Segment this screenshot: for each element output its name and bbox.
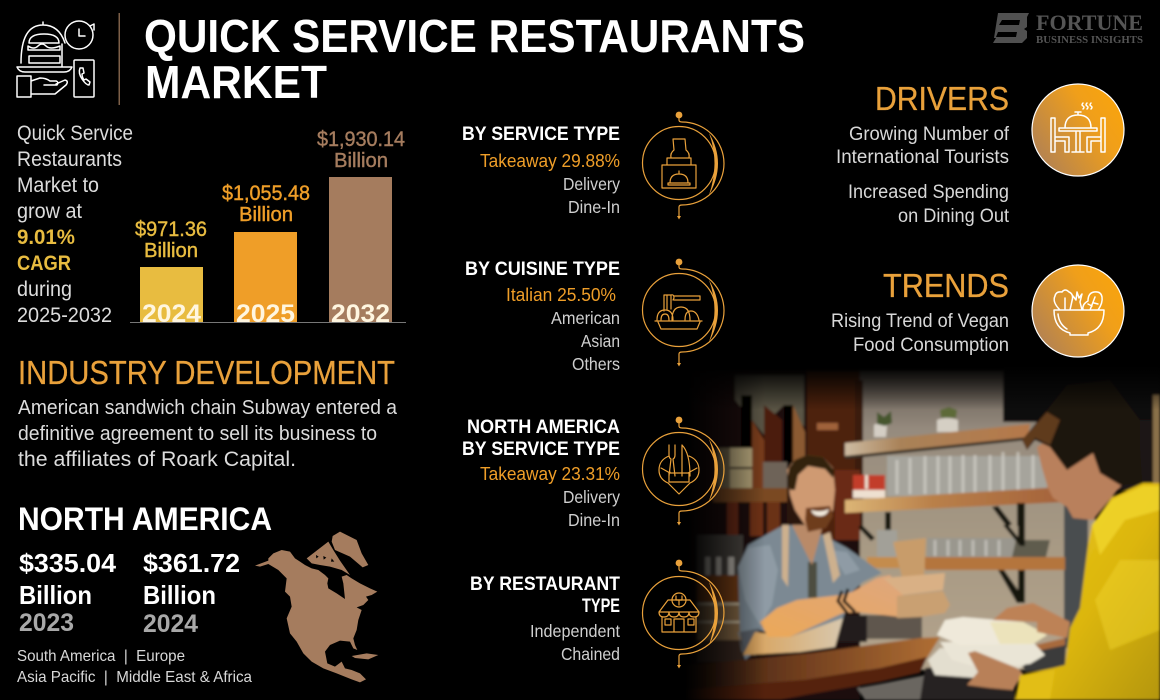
market growth text: Quick Service: [17, 122, 133, 145]
icon: salad bowl: [1032, 265, 1124, 357]
divider: [118, 13, 120, 105]
market growth text: during: [17, 278, 72, 301]
north america stats: $335.04: [19, 548, 117, 578]
segment: by cuisine type: Asian: [581, 331, 620, 351]
icon: regional cutlery ring: [642, 417, 724, 526]
segment: north america by service type: Takeaway 23.31%: [480, 464, 620, 484]
header icon: burger under cloche on hand: [17, 21, 94, 97]
bar chart: market size: Billion: [144, 240, 198, 262]
market growth text: 2025-2032: [17, 304, 112, 327]
trends: [831, 267, 1009, 356]
north america stats: NORTH AMERICA: [18, 501, 272, 537]
market growth text: 9.01%: [17, 226, 75, 249]
segment: by cuisine type: BY CUISINE TYPE: [465, 259, 620, 280]
segment: by restaurant type: [470, 574, 620, 664]
trends: Rising Trend of Vegan: [831, 311, 1009, 332]
logo: Fortune Business Insights: [993, 10, 1143, 46]
north america stats: South America | Europe: [17, 648, 185, 665]
market growth text: CAGR: [17, 252, 71, 275]
drivers: International Tourists: [836, 147, 1009, 168]
segment: by service type: Dine-In: [568, 197, 620, 217]
trends: Food Consumption: [853, 335, 1009, 356]
industry development: definitive agreement to sell its business to: [18, 423, 377, 445]
segment: by cuisine type: American: [551, 308, 620, 328]
segment: by cuisine type: [465, 259, 620, 374]
segment: by restaurant type: Chained: [561, 644, 620, 664]
drivers: Growing Number of: [849, 124, 1010, 145]
north america stats: $361.72: [143, 548, 240, 578]
title: MARKET: [145, 56, 327, 108]
bar chart: market size: $971.36: [135, 218, 207, 241]
bar chart: market size: 2025: [236, 300, 295, 328]
industry development: American sandwich chain Subway entered a: [18, 397, 398, 419]
logo: Fortune Business Insights: FORTUNE: [1036, 10, 1143, 35]
segment: north america by service type: NORTH AMERICA: [467, 417, 620, 438]
north america stats: 2023: [19, 609, 74, 637]
map: North America: [255, 532, 378, 682]
segment: by service type: Delivery: [563, 174, 620, 194]
market growth text: [17, 122, 133, 327]
bar chart: market size: Billion: [239, 204, 293, 226]
segment: by restaurant type: BY RESTAURANT: [470, 574, 620, 595]
bar chart: market size: 2024: [142, 300, 201, 328]
segment: north america by service type: Dine-In: [568, 510, 620, 530]
segment: by cuisine type: Others: [572, 354, 620, 374]
icon: dining table: [1032, 84, 1124, 176]
trends: TRENDS: [883, 267, 1009, 304]
segment: by restaurant type: TYPE: [582, 596, 620, 617]
segment: north america by service type: BY SERVICE TYPE: [462, 439, 620, 460]
bar chart: market size: 2032: [331, 300, 390, 328]
logo: Fortune Business Insights: BUSINESS INSIGHTS: [1036, 34, 1143, 46]
bar chart: market size: Billion: [334, 150, 388, 172]
drivers: on Dining Out: [898, 206, 1010, 227]
segment: by cuisine type: Italian 25.50%: [506, 285, 616, 305]
icon: restaurant storefront ring: [642, 560, 724, 668]
bar chart: market size: [130, 128, 406, 328]
north america stats: 2024: [143, 610, 198, 638]
north america stats: Billion: [143, 580, 216, 610]
market growth text: grow at: [17, 200, 82, 223]
title: [144, 10, 805, 108]
segment: by service type: BY SERVICE TYPE: [462, 124, 620, 145]
bar chart: market size: $1,930.14: [317, 128, 405, 151]
north america stats: Asia Pacific | Middle East & Africa: [17, 669, 252, 686]
industry development: INDUSTRY DEVELOPMENT: [18, 354, 395, 391]
north america stats: Billion: [19, 580, 92, 610]
segment: by service type: [462, 124, 620, 217]
market growth text: Market to: [17, 174, 99, 197]
title: QUICK SERVICE RESTAURANTS: [144, 10, 805, 62]
segment: north america by service type: [462, 417, 620, 530]
icon: pasta ring: [642, 259, 724, 366]
drivers: Increased Spending: [848, 182, 1009, 203]
industry development: [18, 354, 398, 471]
industry development: the affiliates of Roark Capital.: [18, 448, 296, 471]
north america stats: [17, 501, 272, 686]
drivers: [836, 80, 1010, 227]
photo: staff handing takeaway food to customer: [0, 360, 1160, 700]
segment: by service type: Takeaway 29.88%: [480, 151, 620, 171]
segment: by restaurant type: Independent: [530, 621, 620, 641]
drivers: DRIVERS: [875, 80, 1009, 117]
segment: north america by service type: Delivery: [563, 487, 620, 507]
bar chart: market size: $1,055.48: [222, 182, 310, 205]
market growth text: Restaurants: [17, 148, 122, 171]
icon: takeaway ring: [642, 112, 724, 220]
